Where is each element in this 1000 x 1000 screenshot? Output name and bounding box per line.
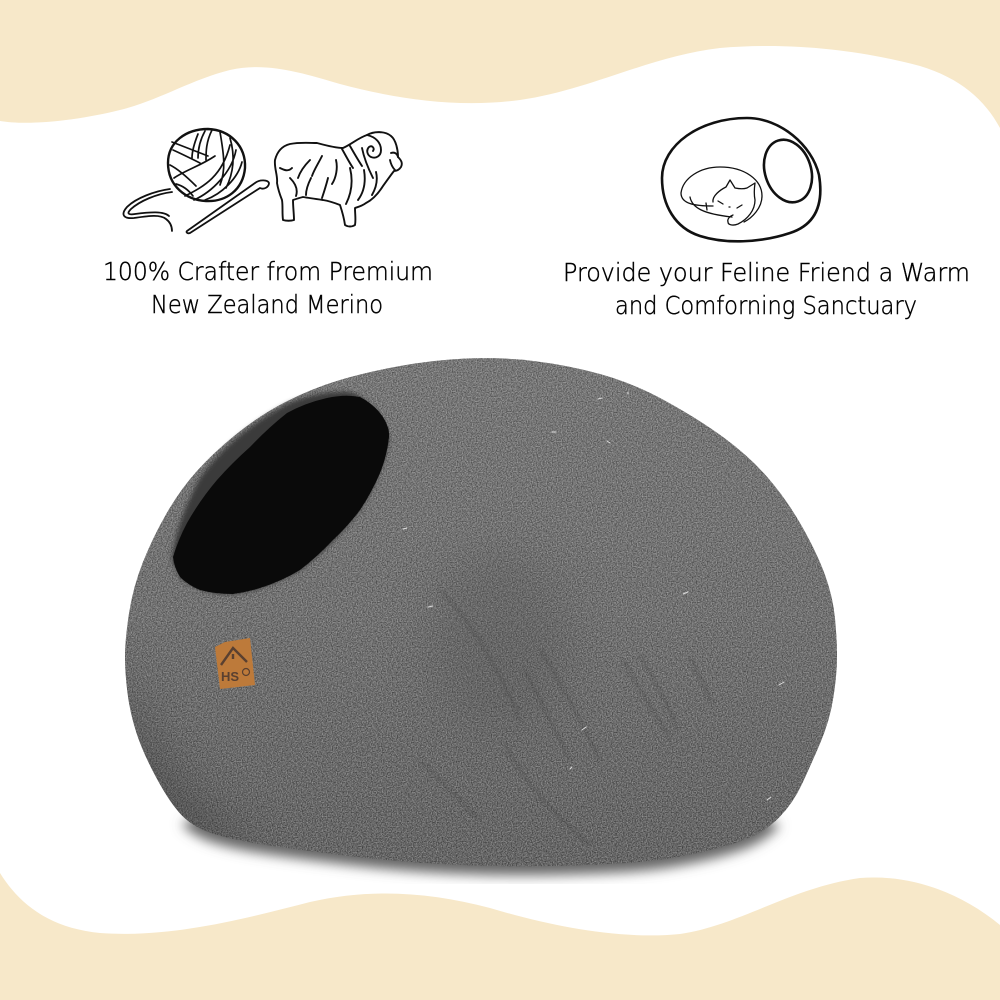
icon: ball of yarn and crochet hook (123, 129, 269, 233)
cave body (125, 358, 837, 866)
caption: sanctuary: Provide your Feline Friend a Warm (563, 258, 970, 287)
caption: sanctuary: and Comforning Sanctuary (615, 291, 917, 320)
top cream wave (0, 0, 1000, 128)
leather brand tag (215, 638, 255, 689)
cave inner rim (172, 392, 389, 594)
ground shadow (182, 789, 780, 875)
white stray fibres (403, 392, 784, 800)
caption: merino: 100% Crafter from Premium (103, 257, 433, 286)
icon: crochet hook (187, 180, 269, 233)
caption: sanctuary (563, 258, 970, 320)
bottom cream wave (0, 873, 1000, 1000)
cave opening (173, 396, 389, 594)
shading and felt wrinkles (110, 550, 712, 880)
icon: cat sleeping in pod (662, 118, 820, 241)
leather brand tag: HS (221, 669, 239, 684)
felt cat cave (110, 358, 837, 880)
caption: merino: New Zealand Merino (151, 290, 383, 319)
icon: merino sheep (275, 132, 402, 226)
caption: merino (103, 257, 433, 319)
